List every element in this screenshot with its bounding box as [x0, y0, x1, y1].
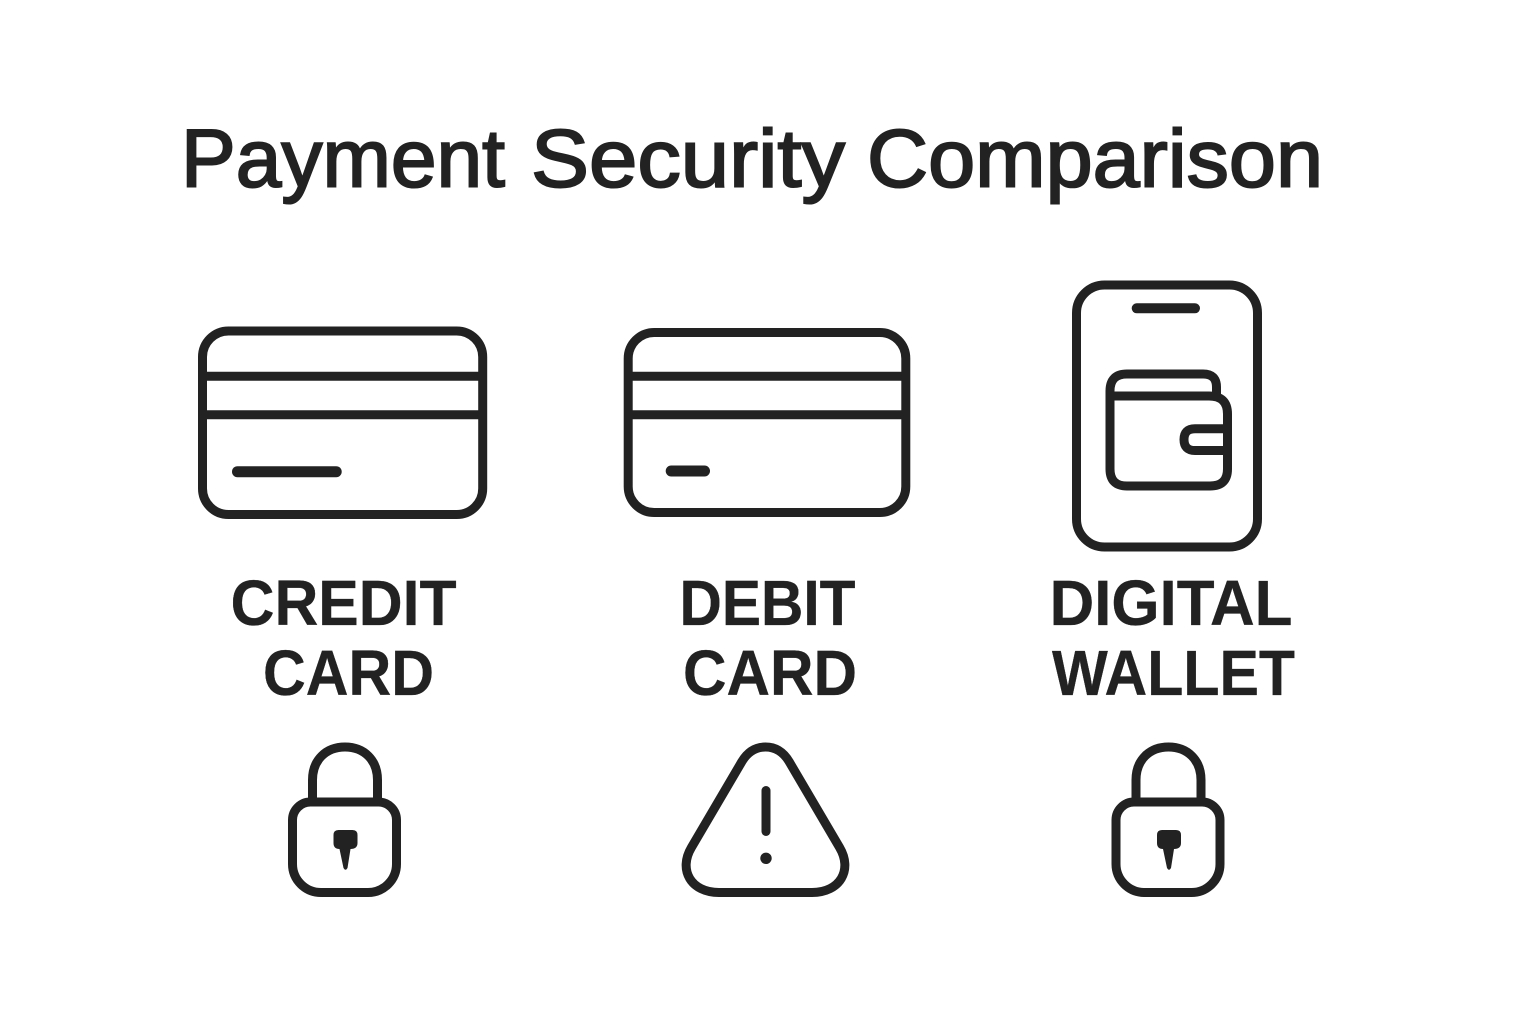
- icon: warning triangle, debit card: [686, 747, 845, 892]
- title: Comparison: [867, 114, 1323, 204]
- label: credit card: CARD: [263, 637, 434, 709]
- label: credit card: [231, 567, 457, 709]
- icon: lock, credit card: [292, 747, 396, 892]
- title: Security: [531, 114, 845, 204]
- label: digital wallet: [1050, 567, 1295, 709]
- icon: debit card: [628, 332, 906, 512]
- label: digital wallet: DIGITAL: [1050, 567, 1292, 639]
- label: debit card: [680, 567, 857, 709]
- icon: phone with wallet: [1076, 285, 1258, 547]
- title: Payment: [181, 114, 505, 204]
- icon: credit card: [202, 331, 483, 514]
- title: [181, 114, 1323, 204]
- label: debit card: CARD: [683, 637, 857, 709]
- icon: lock, digital wallet: [1116, 747, 1220, 892]
- label: debit card: DEBIT: [680, 567, 856, 639]
- label: credit card: CREDIT: [231, 567, 457, 639]
- label: digital wallet: WALLET: [1052, 637, 1295, 709]
